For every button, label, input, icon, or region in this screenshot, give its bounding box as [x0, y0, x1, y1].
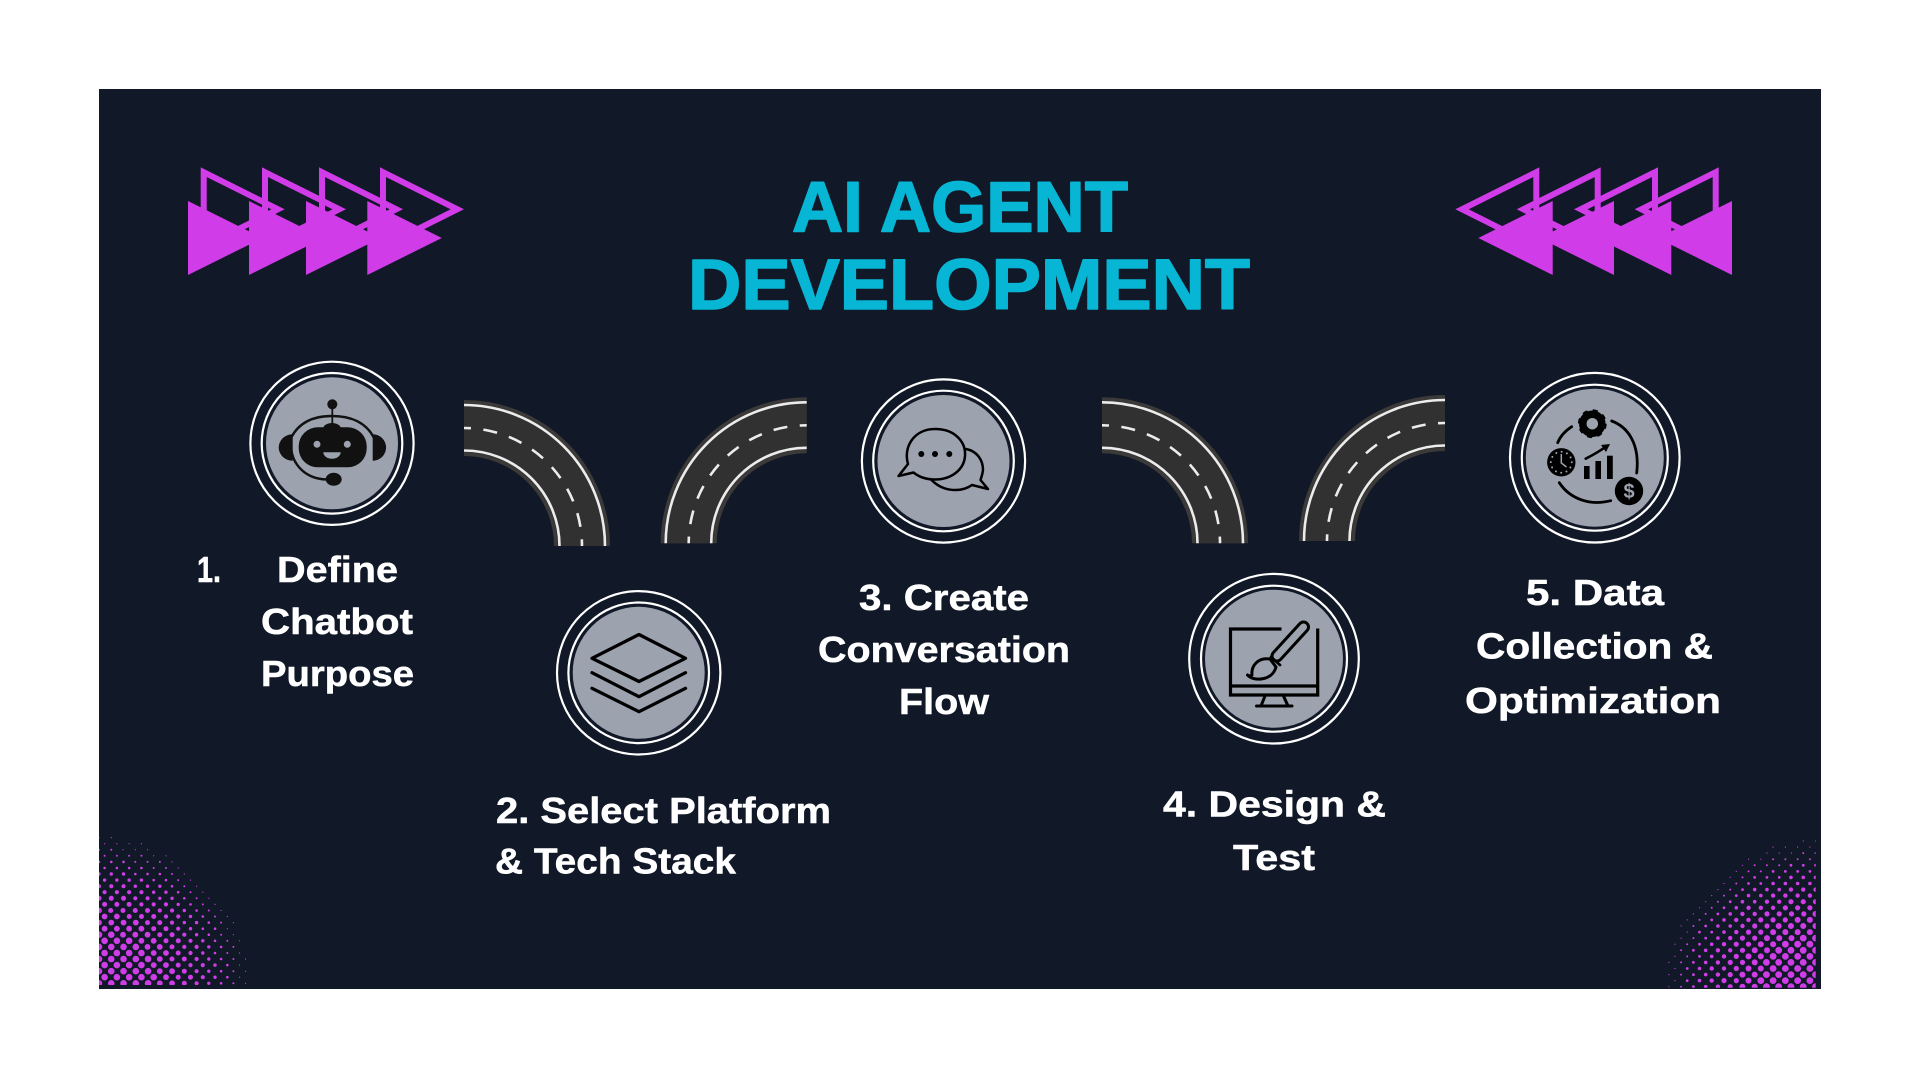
icon: step 4 monitor and brush badge [1189, 574, 1359, 744]
title: DEVELOPMENT [688, 246, 1250, 325]
icon: step 5 data cycle badge: $ [1623, 481, 1635, 503]
icon: step 3 chat bubbles badge [862, 379, 1025, 543]
panel: dark background [99, 89, 1821, 989]
road: curve 4 [1304, 400, 1445, 541]
text: step 5 label: Collection & [1476, 626, 1713, 666]
decoration: halftone dots bottom right [1669, 841, 1816, 987]
decoration: purple triangles pointing right [188, 172, 457, 275]
text: step 3 label: Flow [899, 681, 990, 722]
text: step 3 label: 3. Create [859, 577, 1029, 618]
text: step 5 label [1465, 572, 1721, 721]
text: step 2 label: 2. Select Platform [496, 790, 831, 831]
text: step 3 label: Conversation [818, 629, 1070, 670]
title: AI AGENT [792, 168, 1128, 248]
title [688, 168, 1250, 325]
text: step 1 label: 1. [197, 549, 221, 590]
text: step 1 label: Purpose [261, 653, 414, 694]
road: curve 2 [666, 402, 807, 543]
icon: step 5 data cycle badge [1510, 373, 1680, 542]
text: step 5 label: 5. Data [1526, 572, 1665, 613]
text: step 4 label: Test [1233, 837, 1315, 878]
text: step 1 label: Define [277, 549, 398, 590]
road: curve 1 [464, 405, 605, 546]
text: step 5 label: Optimization [1465, 680, 1721, 721]
icon: step 2 layers badge [557, 591, 720, 754]
text: step 4 label [1163, 784, 1386, 878]
text: step 4 label: 4. Design & [1163, 784, 1386, 824]
text: step 2 label [495, 790, 831, 882]
text: step 1 label [197, 549, 414, 694]
icon: step 1 robot badge [250, 362, 414, 525]
text: step 1 label: Chatbot [261, 601, 413, 642]
decoration: halftone dots bottom left [99, 838, 246, 983]
road: curve 3 [1102, 402, 1243, 543]
decoration: purple triangles pointing left [1462, 172, 1732, 275]
text: step 3 label [818, 577, 1070, 722]
text: step 2 label: & Tech Stack [495, 840, 737, 882]
